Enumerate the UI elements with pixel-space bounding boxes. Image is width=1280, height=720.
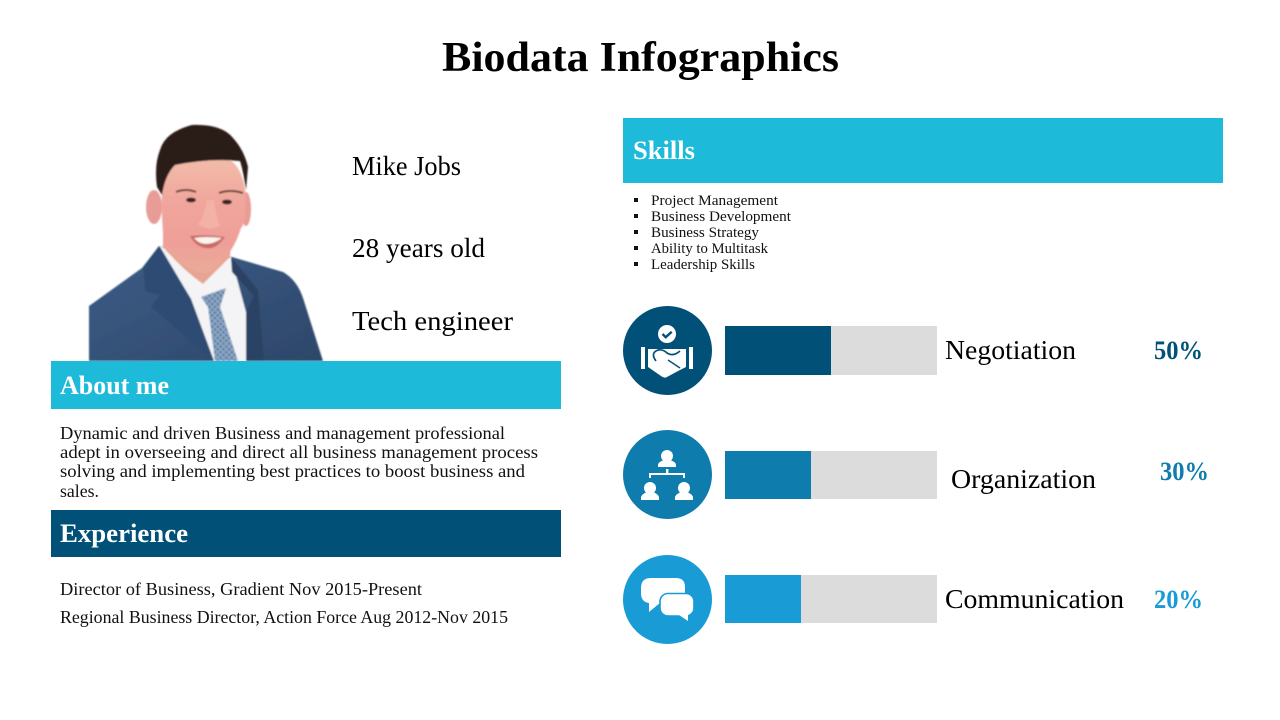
- experience heading: [51, 510, 561, 557]
- skills list: Ability to Multitask: [651, 241, 769, 257]
- lapel right: [231, 257, 264, 361]
- organization percent: 30%: [1160, 457, 1209, 486]
- communication label: Communication: [945, 584, 1125, 614]
- experience text: [60, 579, 508, 627]
- face: [161, 159, 246, 251]
- experience text: Regional Business Director, Action Force Aug 2012-Nov 2015: [60, 607, 508, 627]
- communication percent: 20%: [1154, 585, 1203, 614]
- skills heading: [623, 118, 1223, 183]
- about me text: adept in overseeing and direct all business management process: [60, 442, 538, 462]
- skills heading: Skills: [633, 136, 695, 165]
- about me text: [60, 423, 538, 501]
- negotiation percent: 50%: [1154, 336, 1203, 365]
- about me text: solving and implementing best practices to boost business and: [60, 461, 525, 481]
- job title: Tech engineer: [352, 306, 513, 336]
- about me heading: [51, 361, 561, 409]
- portrait photo: [89, 125, 323, 361]
- title: Biodata Infographics: [442, 35, 839, 81]
- lapel left: [143, 246, 214, 361]
- hair: [156, 125, 248, 195]
- skills list: Leadership Skills: [651, 257, 755, 273]
- smile: [190, 235, 225, 248]
- organization bar: [725, 451, 937, 499]
- neck: [162, 234, 232, 284]
- ears: [146, 190, 162, 224]
- icon: chat bubbles: [623, 555, 712, 644]
- skills list: Business Strategy: [651, 225, 760, 241]
- experience heading: Experience: [60, 519, 188, 548]
- about me text: sales.: [60, 481, 99, 501]
- organization label: Organization: [951, 464, 1097, 494]
- about me text: Dynamic and driven Business and management professional: [60, 423, 505, 443]
- tie: [201, 288, 238, 361]
- age: 28 years old: [352, 233, 486, 263]
- name: Mike Jobs: [352, 151, 461, 181]
- icon: handshake: [623, 306, 712, 395]
- shirt: [159, 245, 246, 361]
- skills list: [634, 193, 791, 273]
- negotiation label: Negotiation: [945, 335, 1077, 365]
- communication bar: [725, 575, 937, 623]
- skills list: Business Development: [651, 209, 791, 225]
- nose: [198, 200, 220, 229]
- eyes and brows: [176, 190, 243, 193]
- about me heading: About me: [60, 371, 169, 400]
- negotiation bar: [725, 326, 937, 375]
- jacket: [89, 246, 323, 361]
- icon: organization: [623, 430, 712, 519]
- experience text: Director of Business, Gradient Nov 2015-Present: [60, 579, 422, 599]
- skills list: Project Management: [651, 193, 778, 209]
